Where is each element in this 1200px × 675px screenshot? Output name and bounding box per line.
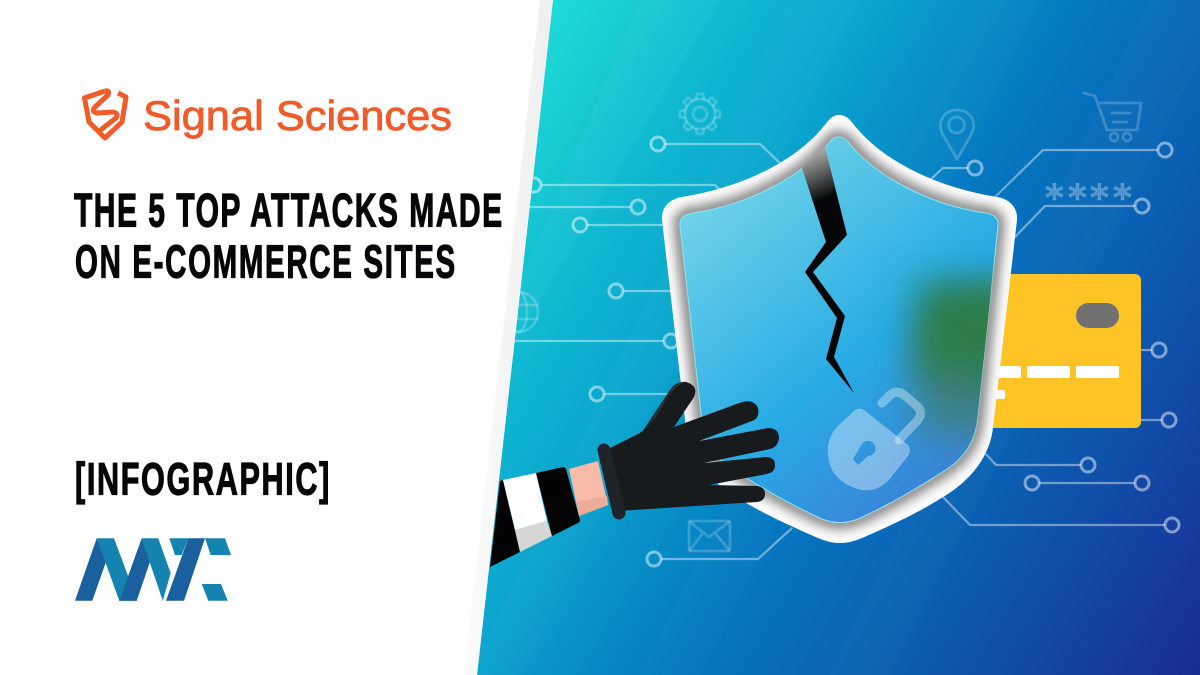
blurred card seen through glass: [918, 285, 1038, 435]
crack: [802, 147, 854, 393]
credit card: [985, 274, 1141, 428]
icon: shield S: [84, 91, 126, 138]
shield glass: [680, 137, 998, 522]
MVT logo: [75, 538, 231, 601]
wrist: [569, 461, 608, 516]
signal sciences logo: [84, 91, 452, 139]
striped sleeve: [490, 467, 580, 567]
icon: globe: [516, 290, 540, 334]
icon: envelope: [689, 521, 730, 551]
diagonal divider stripe: [464, 0, 553, 675]
icon: open padlock: [828, 392, 920, 490]
title: ON E-COMMERCE SITES: [75, 237, 455, 288]
title: THE 5 TOP ATTACKS MADE: [74, 185, 502, 237]
blue background panel: [470, 0, 1200, 675]
circuit lines: [510, 137, 1179, 566]
icon: shopping cart: [1084, 93, 1141, 141]
black glove: [604, 382, 779, 513]
shield: [662, 115, 1038, 543]
thief arm: [490, 382, 779, 567]
icon: gear: [680, 94, 720, 134]
card number: [985, 366, 1119, 399]
glove shading: [642, 382, 686, 432]
glove cuff: [604, 450, 619, 513]
wordmark: Signal Sciences: [143, 92, 452, 139]
infographic tag: [INFOGRAPHIC]: [75, 455, 329, 505]
icon: location pin: [940, 110, 974, 159]
card chip: [1076, 303, 1119, 328]
icon: password asterisks: ****: [1045, 178, 1132, 219]
title: [74, 185, 502, 288]
shield rim: [662, 115, 1017, 543]
